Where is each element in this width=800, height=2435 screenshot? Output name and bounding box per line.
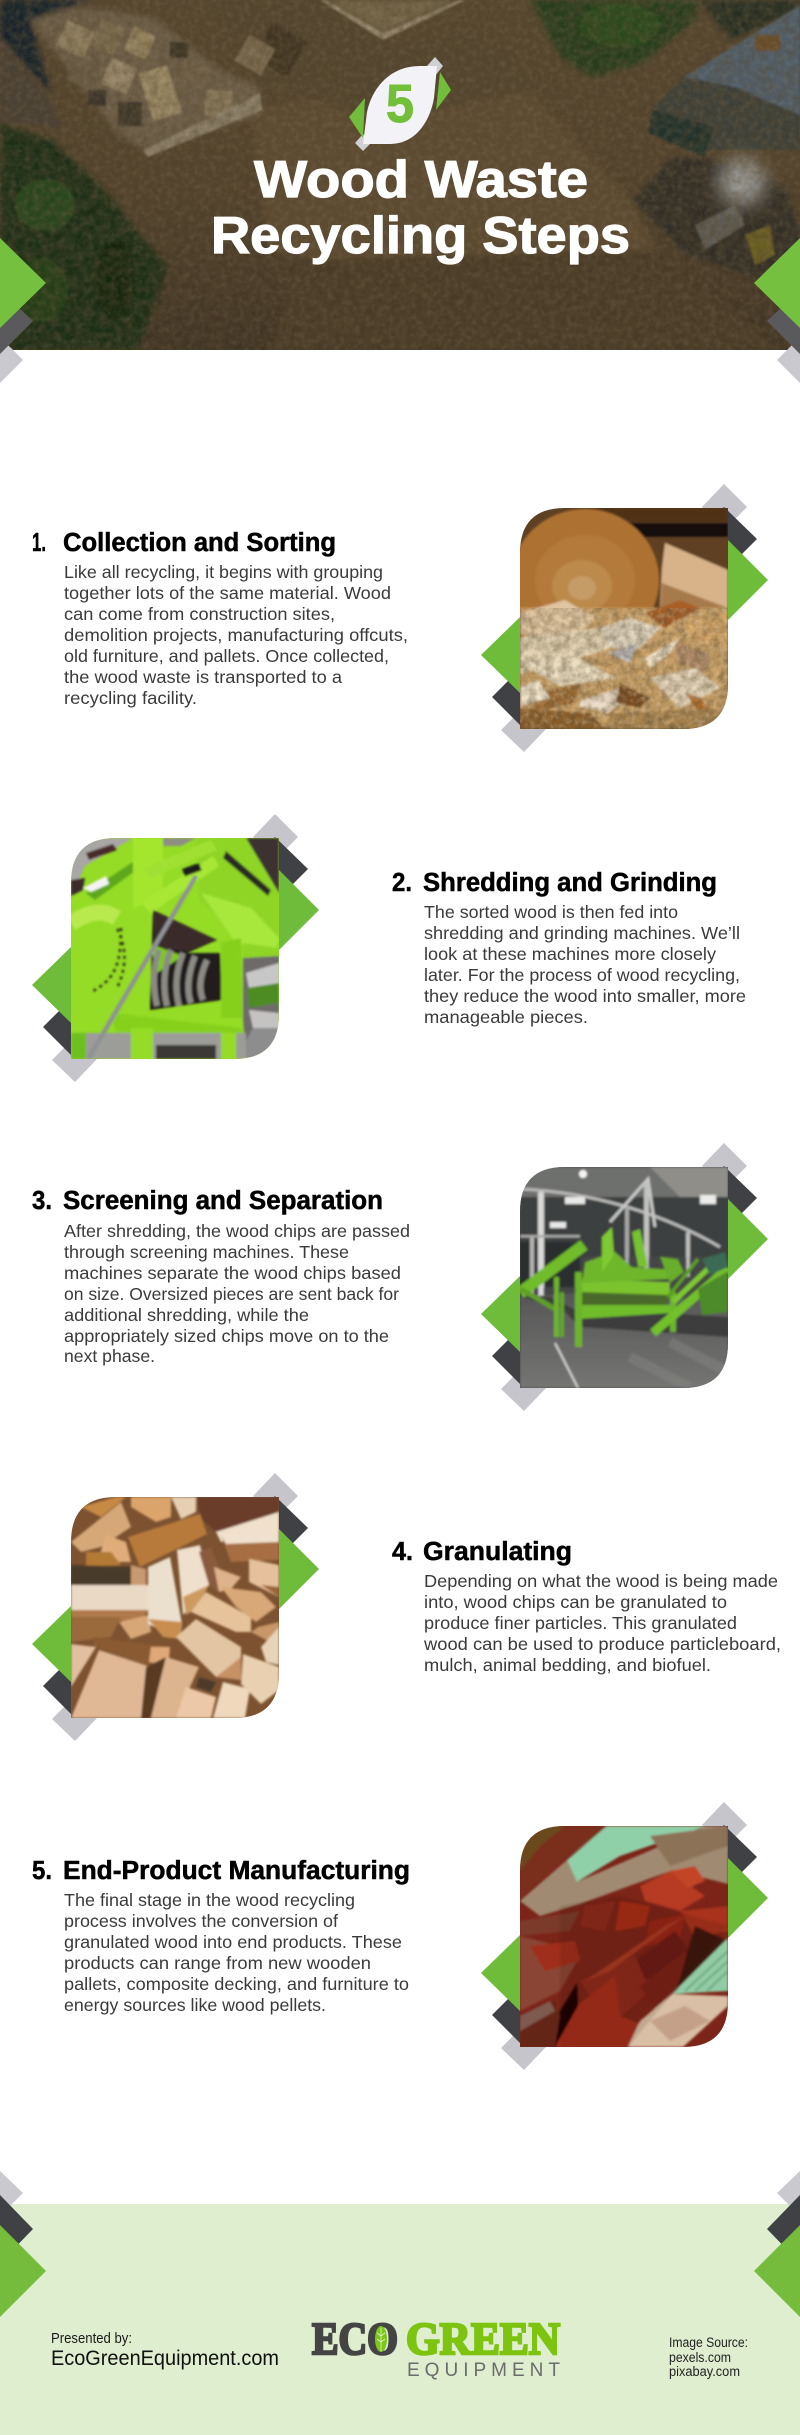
step 3 text: Screening and Separation (63, 1187, 383, 1215)
photo: split firewood pile (71, 1497, 279, 1718)
leaf number badge (349, 57, 451, 151)
image source: Image Source: (669, 2335, 748, 2350)
step 4 text: into, wood chips can be granulated to (424, 1592, 727, 1612)
presented by: Presented by: (51, 2331, 132, 2347)
step 5 text: products can range from new wooden (64, 1953, 371, 1973)
step 3 text: on size. Oversized pieces are sent back for (64, 1284, 399, 1304)
presented by (51, 2331, 279, 2370)
step 1 text: 1. (32, 529, 46, 557)
step 1 text: Like all recycling, it begins with grouping (64, 562, 383, 582)
step 5 text: pallets, composite decking, and furniture to (64, 1974, 409, 1994)
step 1 text (32, 529, 408, 708)
step 4 text: Granulating (423, 1538, 572, 1566)
step 5 text: End-Product Manufacturing (63, 1857, 410, 1885)
step 2 text: shredding and grinding machines. We’ll (424, 923, 740, 943)
image source: pixabay.com (669, 2364, 740, 2379)
step 3 image (481, 1143, 768, 1411)
step 3 text (32, 1187, 410, 1366)
logo: Eco Green Equipment: ECO (312, 2313, 398, 2364)
step 1 text: can come from construction sites, (64, 604, 335, 624)
step 1 text: Collection and Sorting (63, 529, 336, 557)
step 1 text: the wood waste is transported to a (64, 667, 342, 687)
footer corner accents left (0, 2171, 46, 2317)
header photo: aerial wood yard (0, 0, 800, 350)
step 2 text: later. For the process of wood recycling, (424, 965, 740, 985)
footer corner accents right (754, 2171, 800, 2317)
footer panel (0, 2171, 800, 2435)
step 4 text: Depending on what the wood is being made (424, 1571, 778, 1591)
photo: red wood mulch in sacks (520, 1826, 728, 2047)
step 2 image (32, 814, 319, 1082)
header panel (0, 0, 800, 383)
step 4 text: wood can be used to produce particleboard, (423, 1634, 781, 1654)
step 1 text: old furniture, and pallets. Once collected, (64, 646, 389, 666)
photo: green screening machine (520, 1167, 728, 1388)
step 3 text: appropriately sized chips move on to the (64, 1326, 389, 1346)
step 4 text: mulch, animal bedding, and biofuel. (424, 1655, 711, 1675)
step 4 text: 4. (392, 1538, 413, 1566)
step 3 text: machines separate the wood chips based (64, 1263, 401, 1283)
step 4 text: produce finer particles. This granulated (424, 1613, 737, 1633)
step 1 image (481, 484, 768, 752)
step 3 text: through screening machines. These (64, 1242, 349, 1262)
header corner accents right (754, 238, 800, 383)
title (211, 151, 630, 265)
logo: Eco Green Equipment (312, 2313, 560, 2381)
logo: Eco Green Equipment: EQUIPMENT (407, 2360, 560, 2381)
step 2 text: Shredding and Grinding (423, 869, 717, 897)
photo: wood shavings (511, 508, 728, 729)
step 3 text: next phase. (64, 1346, 155, 1366)
step 4 image (32, 1473, 319, 1741)
step 5 image (481, 1802, 768, 2070)
photo: green shredder (71, 838, 279, 1059)
step 1 text: recycling facility. (64, 688, 197, 708)
step 5 text: process involves the conversion of (64, 1911, 338, 1931)
step 2 text: The sorted wood is then fed into (424, 902, 678, 922)
title: Recycling Steps (211, 207, 630, 265)
step 1 text: demolition projects, manufacturing offcuts, (64, 625, 408, 645)
step 2 text: they reduce the wood into smaller, more (424, 986, 746, 1006)
step 5 text (32, 1857, 410, 2015)
step 3 text: 3. (32, 1187, 52, 1215)
step 1 text: together lots of the same material. Wood (64, 583, 391, 603)
step 2 text: look at these machines more closely (424, 944, 716, 964)
header corner accents left (0, 238, 46, 383)
image source: pexels.com (669, 2350, 731, 2365)
title: Wood Waste (254, 151, 588, 209)
step 4 text (392, 1538, 781, 1675)
image source (669, 2335, 748, 2379)
presented by: EcoGreenEquipment.com (51, 2347, 279, 2370)
step 2 text: 2. (392, 869, 412, 897)
step 5 text: 5. (32, 1857, 52, 1885)
step 2 text (392, 869, 746, 1027)
step 3 text: additional shredding, while the (64, 1305, 309, 1325)
step 3 text: After shredding, the wood chips are passed (64, 1221, 410, 1241)
step 2 text: manageable pieces. (424, 1007, 588, 1027)
step 5 text: The final stage in the wood recycling (64, 1890, 355, 1910)
leaf number badge: 5 (386, 74, 414, 134)
step 5 text: granulated wood into end products. These (64, 1932, 402, 1952)
logo: Eco Green Equipment: GREEN (406, 2313, 560, 2364)
step 5 text: energy sources like wood pellets. (64, 1995, 326, 2015)
